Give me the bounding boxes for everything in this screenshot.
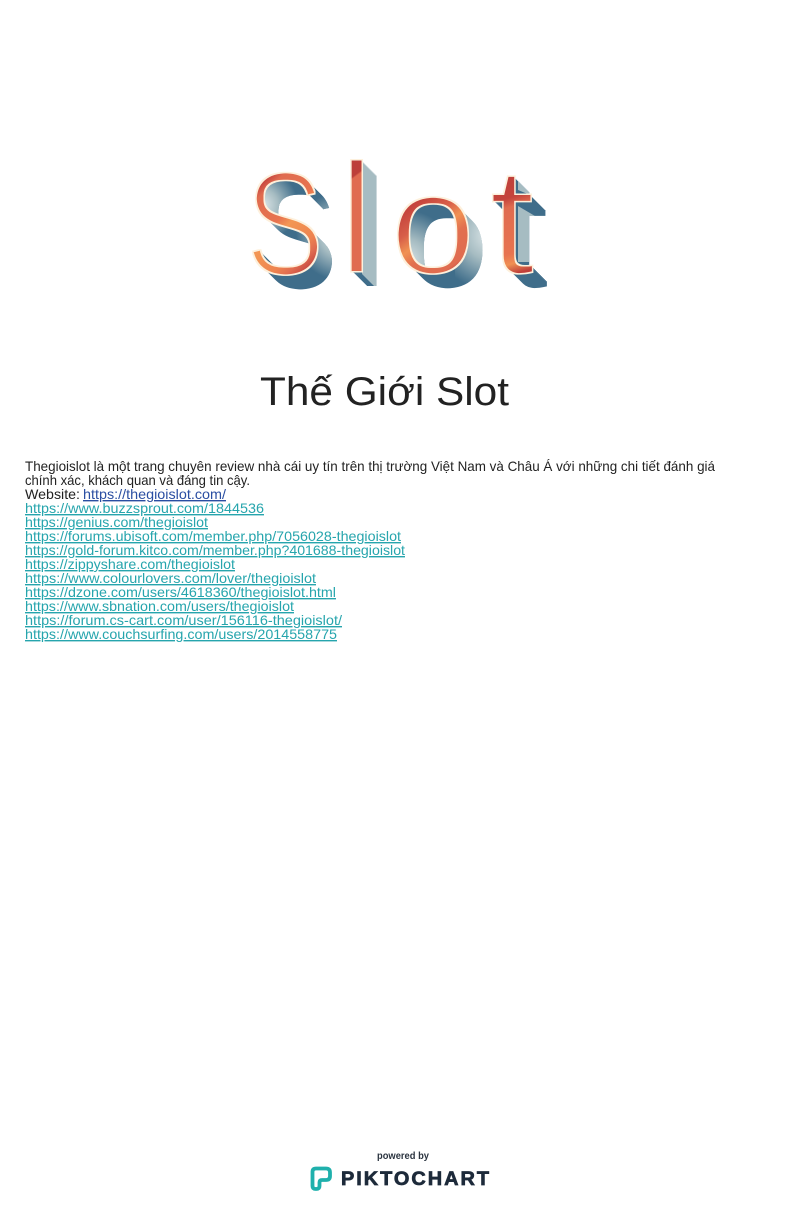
logo face letters: S bbox=[246, 141, 325, 307]
logo face letters bbox=[246, 131, 535, 307]
powered by label: powered by bbox=[377, 1151, 429, 1162]
description text: chính xác, khách quan và đáng tin cậy. bbox=[25, 472, 250, 488]
description and links bbox=[25, 458, 715, 642]
link list: https://dzone.com/users/4618360/thegioislot.html bbox=[25, 584, 336, 600]
Piktochart wordmark: PIKTOCHART bbox=[341, 1168, 489, 1190]
link list: https://www.couchsurfing.com/users/2014558775 bbox=[25, 626, 337, 642]
logo extrusion: t bbox=[489, 135, 535, 307]
logo face letters: o bbox=[390, 142, 476, 305]
logo face letters: t bbox=[489, 135, 535, 307]
link list: https://gold-forum.kitco.com/member.php?401688-thegioislot bbox=[25, 542, 405, 558]
logo extrusion: S bbox=[246, 141, 325, 307]
link list bbox=[25, 500, 405, 642]
link list: https://www.colourlovers.com/lover/thegioislot bbox=[25, 570, 316, 586]
logo extrusion: o bbox=[390, 142, 476, 305]
infographic canvas bbox=[25, 159, 715, 1191]
footer: powered by Piktochart bbox=[312, 1151, 489, 1190]
logo side shading bbox=[264, 162, 538, 286]
logo extrusion: l bbox=[339, 131, 374, 307]
link list: https://forum.cs-cart.com/user/156116-thegioislot/ bbox=[25, 612, 342, 628]
description text: Thegioislot là một trang chuyên review nhà cái uy tín trên thị trường Việt Nam và Châu Á với những chi tiết đánh giá bbox=[25, 458, 715, 474]
logo face letters: l bbox=[339, 131, 374, 307]
description text bbox=[25, 458, 715, 488]
logo: 3D Slot wordmark bbox=[252, 159, 547, 290]
icon: Piktochart P mark bbox=[312, 1168, 330, 1189]
title: Thế Giới Slot bbox=[260, 370, 509, 414]
website line: Website: bbox=[25, 486, 80, 502]
link list: https://zippyshare.com/thegioislot bbox=[25, 556, 235, 572]
website line: https://thegioislot.com/ bbox=[83, 486, 226, 502]
link list: https://forums.ubisoft.com/member.php/7056028-thegioislot bbox=[25, 528, 401, 544]
website line bbox=[25, 486, 226, 502]
logo extrusion bbox=[246, 131, 535, 307]
link list: https://genius.com/thegioislot bbox=[25, 514, 208, 530]
link list: https://www.sbnation.com/users/thegioislot bbox=[25, 598, 294, 614]
link list: https://www.buzzsprout.com/1844536 bbox=[25, 500, 264, 516]
